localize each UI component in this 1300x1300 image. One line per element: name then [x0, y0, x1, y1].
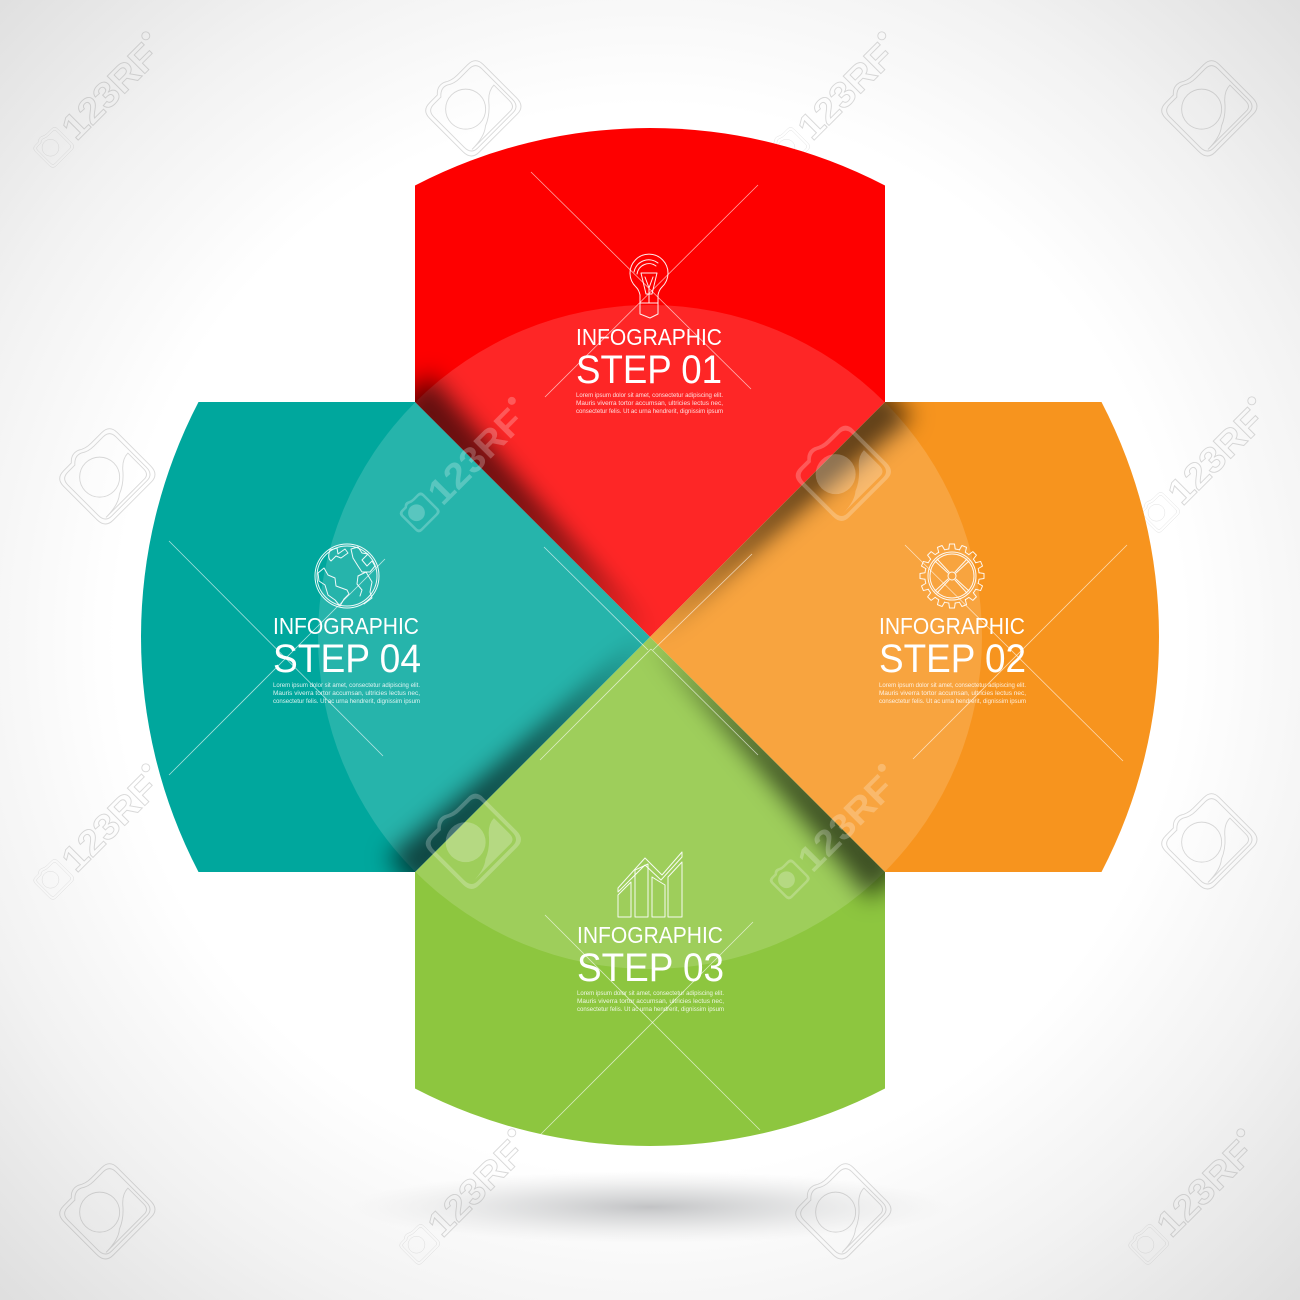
text: step 01 [576, 324, 723, 415]
text: step 03: STEP 03 [577, 946, 724, 990]
panel: step 02 orange petal [650, 402, 1159, 872]
icon: light bulb [630, 254, 668, 318]
text: step 01: consectetur felis. Ut ac urna hendrerit, dignissim ipsum [576, 408, 723, 415]
text: step 04: STEP 04 [273, 637, 421, 681]
text: step 04: INFOGRAPHIC [273, 613, 419, 639]
text: step 01: Mauris viverra tortor accumsan, ultricies lectus nec, [576, 400, 723, 407]
text: step 01: STEP 01 [576, 348, 722, 392]
shadow: green over teal [378, 645, 639, 872]
text: step 03: Mauris viverra tortor accumsan, ultricies lectus nec, [577, 998, 724, 1005]
text: step 02: Lorem ipsum dolor sit amet, consectetur adipiscing elit. [879, 682, 1026, 689]
text: step 01: Lorem ipsum dolor sit amet, consectetur adipiscing elit. [576, 392, 723, 399]
icon: bar chart with trend [618, 852, 682, 917]
icon: globe [315, 544, 379, 608]
text: step 03: consectetur felis. Ut ac urna hendrerit, dignissim ipsum [577, 1006, 724, 1013]
panel: step 03 green petal [415, 637, 885, 1146]
inner translucent circle [318, 305, 982, 969]
icon: gear [920, 544, 984, 608]
text: step 04: Lorem ipsum dolor sit amet, consectetur adipiscing elit. [273, 682, 420, 689]
floor shadow [350, 1171, 950, 1243]
text: step 02 [879, 613, 1026, 705]
panel: step 04 teal petal [141, 402, 650, 872]
shadow: red over orange [650, 381, 913, 637]
text: step 02: consectetur felis. Ut ac urna hendrerit, dignissim ipsum [879, 698, 1026, 705]
text: step 01: INFOGRAPHIC [576, 324, 722, 350]
text: step 03: INFOGRAPHIC [577, 922, 723, 948]
text: step 04: Mauris viverra tortor accumsan, ultricies lectus nec, [273, 690, 420, 697]
shadow: orange over green [656, 646, 885, 910]
text: step 04: consectetur felis. Ut ac urna hendrerit, dignissim ipsum [273, 698, 420, 705]
text: step 02: STEP 02 [879, 637, 1026, 681]
text: step 04 [273, 613, 421, 705]
text: step 02: INFOGRAPHIC [879, 613, 1025, 639]
text: step 03 [577, 922, 724, 1013]
text: step 02: Mauris viverra tortor accumsan, ultricies lectus nec, [879, 690, 1026, 697]
panel: step 01 red petal [415, 128, 885, 637]
shadow: teal over red [394, 374, 650, 637]
text: step 03: Lorem ipsum dolor sit amet, consectetur adipiscing elit. [577, 990, 724, 997]
thin crossing guide lines [169, 172, 1127, 1135]
watermarks over coloured petals [394, 393, 909, 905]
